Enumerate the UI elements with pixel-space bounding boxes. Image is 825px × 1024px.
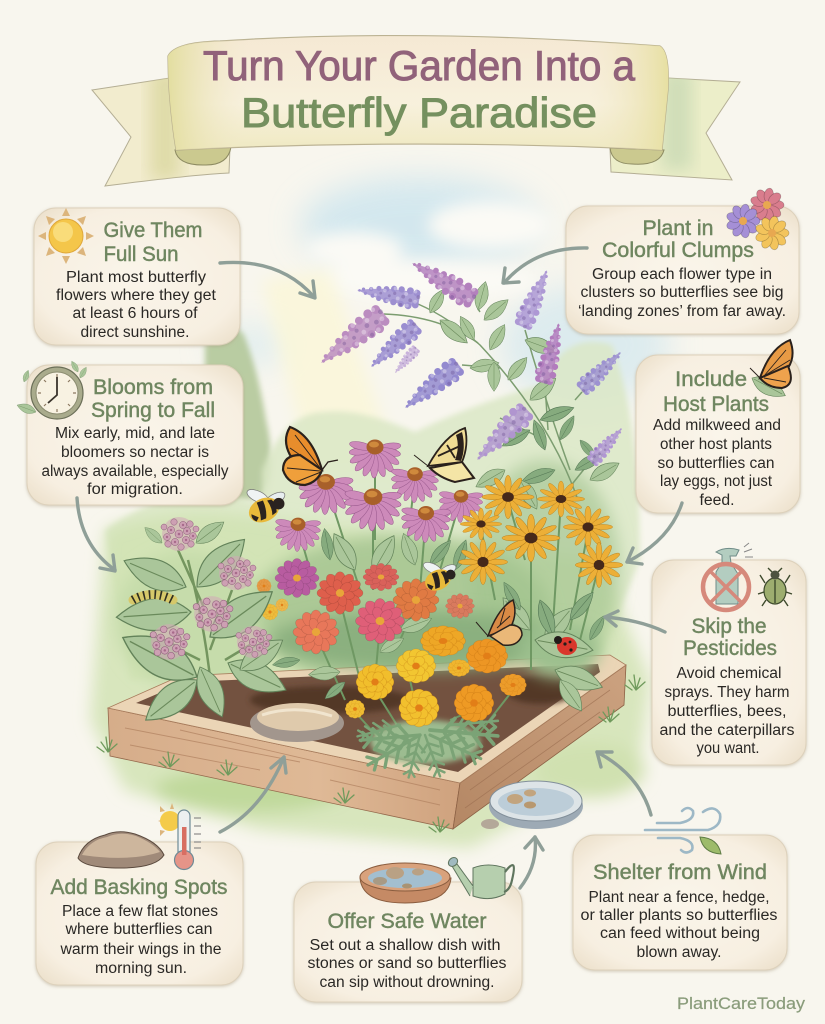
heading: Colorful Clumps <box>602 239 754 262</box>
body text: can feed without being <box>600 925 760 942</box>
title banner <box>92 36 740 186</box>
echinacea stems <box>298 450 461 590</box>
heading: Spring to Fall <box>91 399 215 422</box>
heading <box>104 219 202 266</box>
panel: Skip the Pesticides <box>652 543 806 765</box>
icon: beetle <box>758 568 792 606</box>
arrow: water <box>520 837 543 888</box>
title line two: Butterfly Paradise <box>241 89 597 136</box>
buddleia stems <box>384 298 590 500</box>
watermark: PlantCareToday <box>677 995 806 1013</box>
body text <box>42 425 229 498</box>
heading <box>663 368 769 416</box>
panel: Blooms from Spring to Fall <box>16 360 243 505</box>
zinnia stems and leaves <box>272 600 434 702</box>
panel: Shelter from Wind <box>573 808 787 970</box>
right ribbon tail <box>610 78 740 180</box>
body text: Plant most butterfly <box>66 269 206 286</box>
body text: Avoid chemical <box>676 665 782 682</box>
heading: Skip the <box>692 615 766 638</box>
right tail shading <box>662 70 692 170</box>
arrow: pesticides <box>605 611 665 632</box>
painted lady butterfly <box>476 600 522 645</box>
heading <box>602 217 754 262</box>
panel: Give Them Full Sun <box>34 208 240 345</box>
body text: Set out a shallow dish with <box>310 937 500 954</box>
body text <box>653 417 781 509</box>
grass tufts <box>97 675 645 832</box>
icon: crossed out spray bottle <box>703 543 753 610</box>
swallowtail butterfly <box>414 428 474 482</box>
body text: Group each flower type in <box>592 266 772 283</box>
milkweed plant <box>114 516 292 731</box>
arrow: host plants <box>627 503 682 564</box>
body text: other host plants <box>660 436 772 453</box>
foliage mass <box>115 460 620 690</box>
heading: Full Sun <box>104 243 178 266</box>
panel: Include Host Plants <box>636 340 800 513</box>
background tree <box>205 329 271 500</box>
ladybug <box>533 628 595 663</box>
heading: Add Basking Spots <box>50 876 228 899</box>
body text <box>56 269 217 341</box>
sun glow <box>262 270 400 470</box>
basking stone in bed <box>250 703 344 742</box>
heading <box>91 376 215 422</box>
body text: at least 6 hours of <box>72 305 198 322</box>
body text: ‘landing zones’ from far away. <box>578 303 786 320</box>
bed wood grain <box>125 728 440 805</box>
body text: always available, especially <box>42 463 229 480</box>
body text: you want. <box>696 740 760 757</box>
caterpillar <box>133 594 173 600</box>
water dish on ground <box>481 781 583 829</box>
zinnia flowers <box>257 558 474 654</box>
arrow: basking <box>220 757 286 832</box>
heading: Blooms from <box>93 376 213 399</box>
icon: shallow dish <box>360 863 451 903</box>
icon: wind swirls with leaf <box>645 808 721 854</box>
bumblebee left <box>245 487 287 527</box>
heading: Include <box>675 368 747 391</box>
milkweed leaves <box>114 516 292 731</box>
arrow: shelter <box>597 752 651 815</box>
body text <box>578 266 786 320</box>
left tail shading <box>150 70 180 180</box>
body text: morning sun. <box>95 960 187 977</box>
heading: Shelter from Wind <box>593 861 767 884</box>
soil <box>136 664 600 772</box>
echinacea flowers <box>275 440 483 552</box>
panel: Add Basking Spots <box>36 803 243 985</box>
rudbeckia stems and leaves <box>481 500 608 716</box>
panel: Plant in Colorful Clumps <box>566 187 799 334</box>
heading <box>683 615 777 660</box>
heading: Offer Safe Water <box>328 910 486 933</box>
buddleia leaves <box>425 280 623 513</box>
clouds <box>307 201 552 300</box>
heading: Host Plants <box>663 393 769 416</box>
icon: flat stone <box>78 832 164 868</box>
heading: Plant in <box>642 217 714 240</box>
heading: Pesticides <box>683 637 777 660</box>
body text: Mix early, mid, and late <box>55 425 215 442</box>
body text: butterflies, bees, <box>668 703 786 720</box>
raised wooden garden bed <box>97 655 645 832</box>
bed front face <box>108 708 460 829</box>
body text: blown away. <box>636 944 722 961</box>
icon: three flowers <box>725 187 789 251</box>
milkweed stems <box>170 550 250 700</box>
body text: clusters so butterflies see big <box>580 284 784 301</box>
bumblebee middle <box>422 560 458 595</box>
body text: and the caterpillars <box>660 722 795 739</box>
arrow: blooms to milkweed <box>77 498 115 571</box>
grass wash <box>90 512 650 848</box>
hedge <box>105 342 640 680</box>
body text <box>59 903 222 977</box>
body text: Plant near a fence, hedge, <box>588 889 770 906</box>
body text <box>308 937 507 991</box>
bed top rim <box>108 655 626 783</box>
marigold foliage <box>355 680 513 780</box>
heading: Give Them <box>104 219 202 242</box>
body text: warm their wings in the <box>59 941 222 958</box>
icon: sun <box>38 208 94 264</box>
body text <box>660 665 795 757</box>
panel: Offer Safe Water <box>294 856 522 1002</box>
left ribbon tail <box>92 78 230 186</box>
foliage behind flowers <box>270 610 600 678</box>
body text <box>580 889 778 961</box>
arrow: sun to garden <box>220 262 315 298</box>
marigold flowers <box>345 626 526 727</box>
body text: direct sunshine. <box>80 324 190 341</box>
body text: so butterflies can <box>658 455 774 472</box>
body text: Add milkweed and <box>653 417 781 434</box>
body text: can sip without drowning. <box>320 974 494 991</box>
ribbon folds <box>175 147 664 165</box>
icon: watering can <box>447 856 514 899</box>
arrow: clumps to buddleia <box>503 248 587 283</box>
body text: Place a few flat stones <box>62 903 218 920</box>
body text: feed. <box>700 492 734 509</box>
body text: flowers where they get <box>56 287 217 304</box>
bed right face <box>453 665 626 829</box>
sky wash <box>210 177 670 405</box>
ribbon body <box>168 36 668 150</box>
body text: or taller plants so butterflies <box>580 907 778 924</box>
milkweed flower clusters <box>150 517 272 660</box>
rudbeckia flowers <box>458 475 623 588</box>
body text: lay eggs, not just <box>660 473 773 490</box>
body text: stones or sand so butterflies <box>308 955 507 972</box>
icon: sun and thermometer <box>158 803 201 870</box>
body text: for migration. <box>87 481 183 498</box>
body text: bloomers so nectar is <box>61 444 209 461</box>
buddleia shrub <box>312 252 628 513</box>
body text: where butterflies can <box>64 921 212 938</box>
garden watercolor backdrop <box>90 177 670 848</box>
buddleia flower spikes <box>312 252 628 469</box>
title line one: Turn Your Garden Into a <box>203 42 636 89</box>
icon: monarch butterfly on leaf <box>748 340 793 403</box>
icon: clock with leaves <box>16 360 89 419</box>
echinacea leaves <box>319 528 471 576</box>
body text: sprays. They harm <box>664 684 790 701</box>
monarch butterfly <box>283 427 338 485</box>
